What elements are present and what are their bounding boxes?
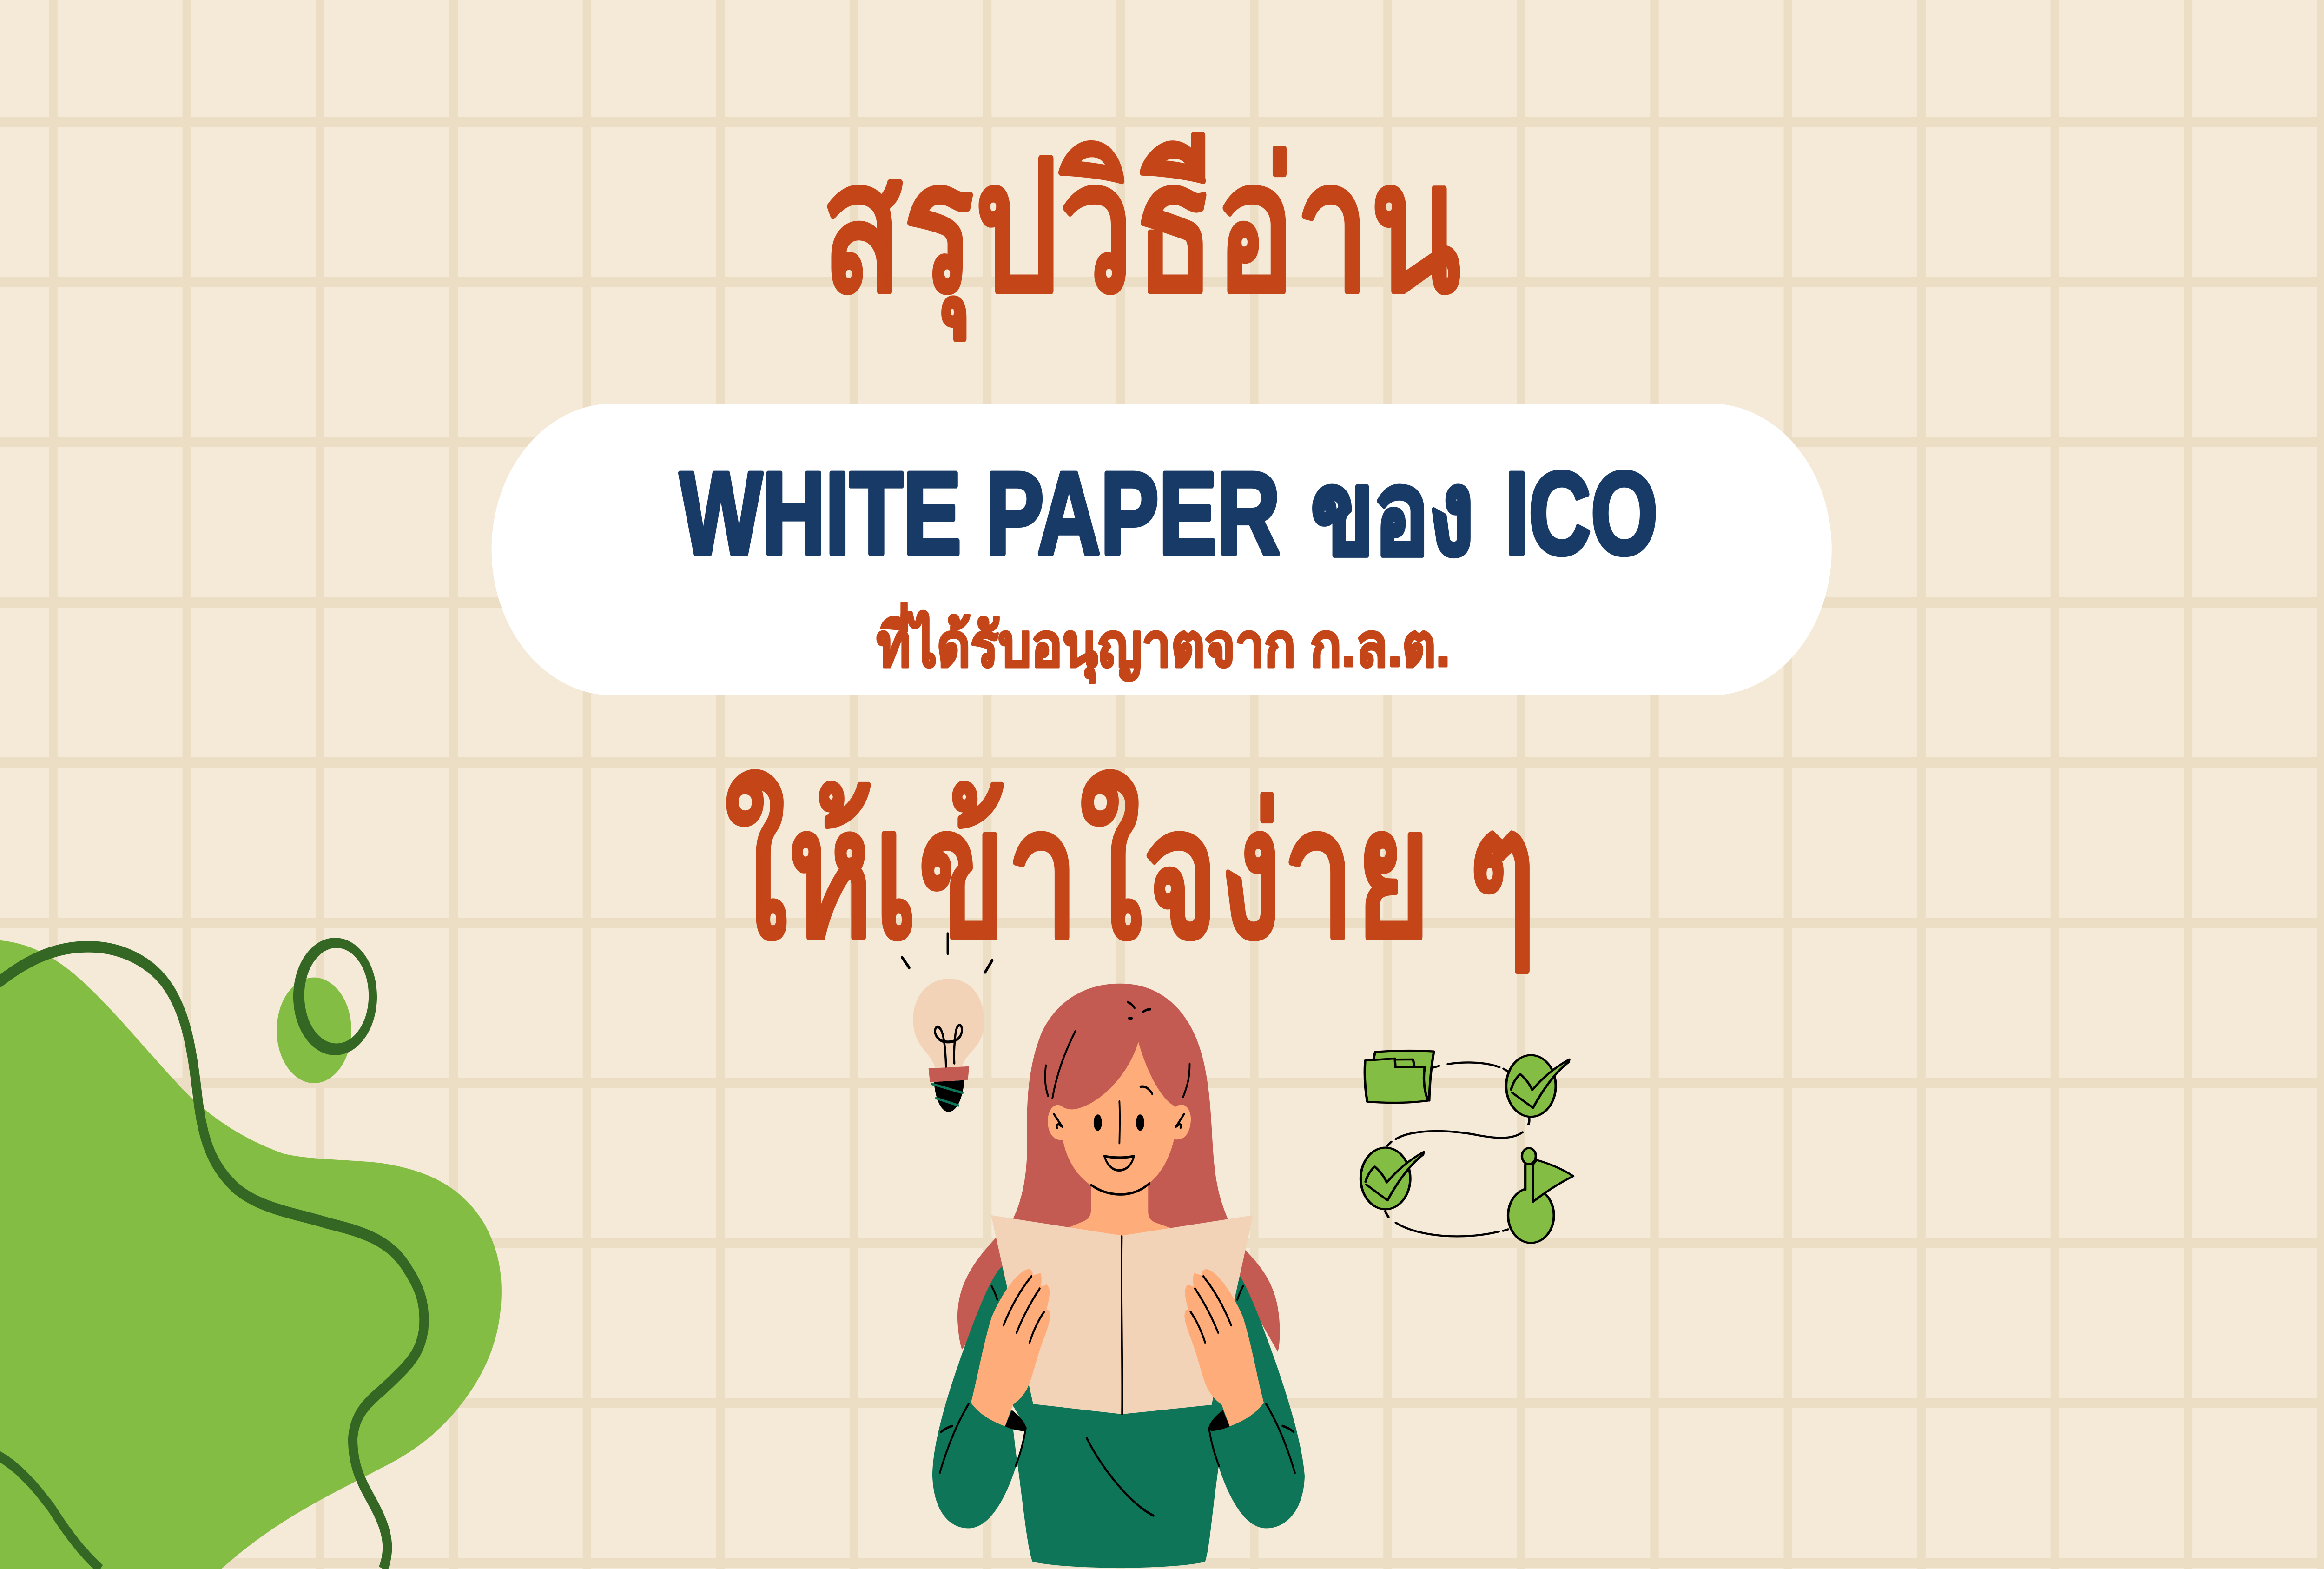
face lines	[1045, 1002, 1190, 1194]
pill heading: ของ	[1311, 448, 1474, 579]
face	[1061, 1042, 1177, 1195]
white pill panel	[492, 404, 1832, 695]
flag goal	[1508, 1148, 1573, 1243]
icon: checklist flow	[1360, 1051, 1573, 1243]
title: first line: สรุปวิธีอ่าน	[822, 126, 1461, 340]
left hand	[940, 1269, 1050, 1473]
checkmark badge bottom	[1360, 1148, 1424, 1209]
hair	[957, 984, 1280, 1352]
sweater	[932, 1266, 1305, 1568]
checkmark badge top	[1506, 1055, 1569, 1117]
icon: light bulb	[902, 934, 992, 1112]
flow connectors	[1385, 1062, 1529, 1236]
pill heading: WHITE PAPER	[680, 448, 1280, 579]
eyes	[1094, 1114, 1144, 1131]
decorative green blob with squiggle	[0, 940, 502, 1569]
pill heading	[680, 448, 1658, 579]
pill heading: ICO	[1505, 448, 1658, 579]
neck	[1069, 1183, 1173, 1237]
right hand	[1184, 1269, 1295, 1473]
title: second line: ให้เข้าใจง่าย ๆ	[724, 771, 1537, 977]
folder	[1365, 1051, 1434, 1103]
illustration: woman reading a document	[932, 984, 1305, 1568]
decorative green dot with ring	[277, 938, 377, 1083]
document	[991, 1215, 1253, 1414]
pill subheading: ที่ได้รับอนุญาตจาก ก.ล.ต.	[877, 603, 1450, 683]
sweater fold	[1087, 1438, 1154, 1516]
ears	[1048, 1105, 1191, 1140]
